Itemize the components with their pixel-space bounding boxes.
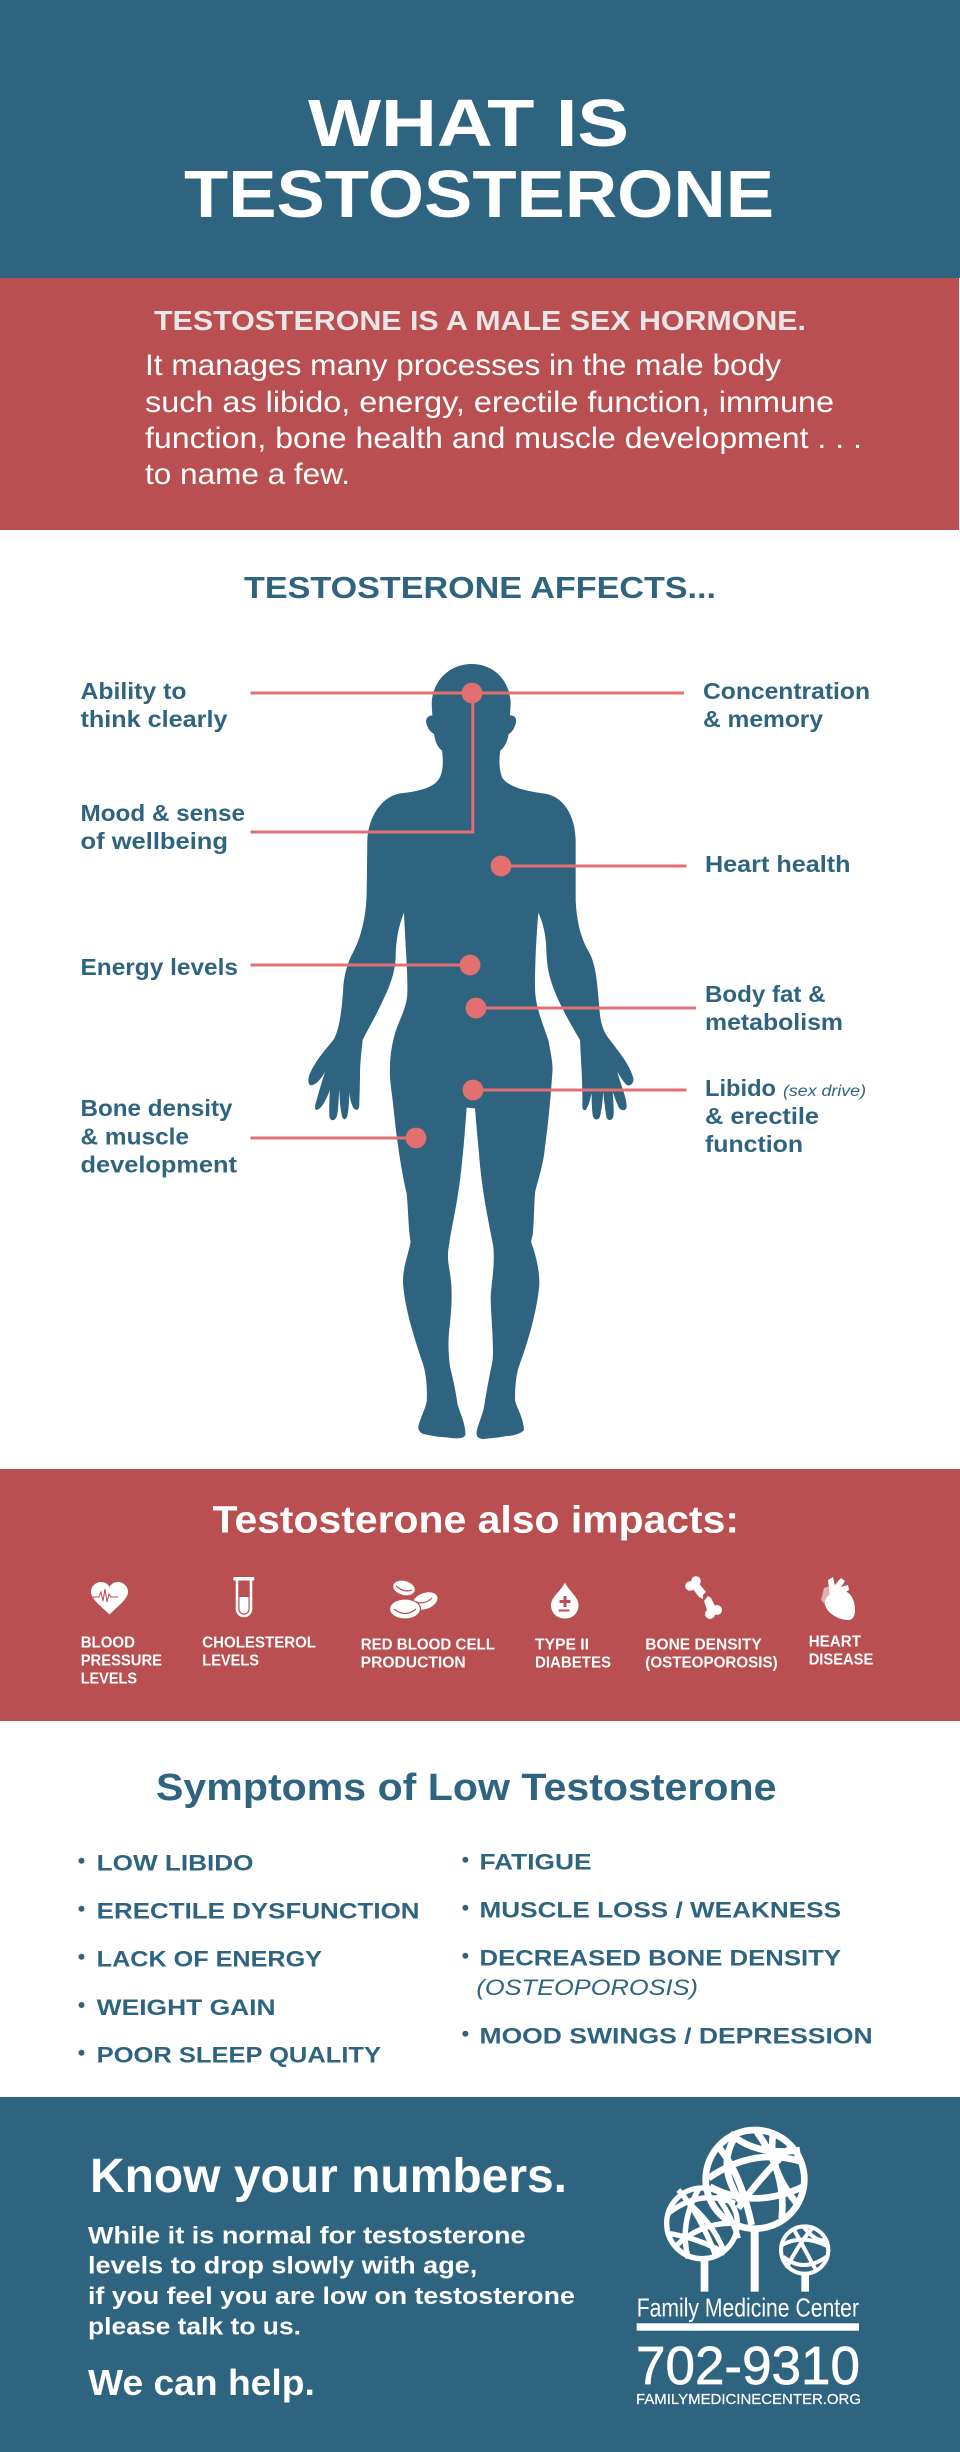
- icon: broken bone: [685, 1576, 722, 1619]
- definition paragraph: to name a few.: [145, 458, 350, 491]
- heading: testosterone affects: TESTOSTERONE AFFECTS...: [244, 570, 716, 605]
- label: blood pressure levels: [81, 1635, 162, 1688]
- symptoms list: left column: ERECTILE DYSFUNCTION: [97, 1899, 419, 1924]
- symptoms list: left column: LOW LIBIDO: [97, 1851, 254, 1876]
- logo name: Family Medicine Center: [637, 2293, 859, 2323]
- panel: testosterone also impacts: [0, 1469, 960, 1721]
- callout lines and dots: [250, 683, 696, 1148]
- label: cholesterol levels: [202, 1635, 316, 1670]
- label: red blood cell production: RED BLOOD CELL: [361, 1636, 495, 1653]
- label: libido and erectile function: & erectile: [705, 1103, 819, 1129]
- website: FAMILYMEDICINECENTER.ORG: [636, 2392, 861, 2408]
- definition paragraph: function, bone health and muscle development . . .: [145, 422, 862, 455]
- definition paragraph: such as libido, energy, erectile function, immune: [145, 386, 834, 419]
- symptoms heading: Symptoms of Low Testosterone: [156, 1767, 777, 1809]
- label: heart disease: [809, 1633, 873, 1668]
- icon: anatomical heart: [821, 1577, 855, 1620]
- icon: body silhouette: [308, 664, 633, 1439]
- title: WHAT IS: [308, 86, 629, 161]
- body diagram: [80, 664, 870, 1439]
- label: body fat and metabolism: metabolism: [705, 1009, 843, 1035]
- label: concentration and memory: & memory: [703, 706, 823, 732]
- label: type ii diabetes: [535, 1636, 611, 1671]
- label: bone density and muscle development: Bone density: [80, 1095, 233, 1121]
- icon: family medicine center tree logo: [667, 2130, 828, 2292]
- label: bone density and muscle development: [80, 1095, 237, 1178]
- label: blood pressure levels: LEVELS: [81, 1671, 137, 1688]
- label: concentration and memory: Concentration: [703, 678, 870, 704]
- footer paragraph: please talk to us.: [88, 2313, 301, 2340]
- label: cholesterol levels: LEVELS: [202, 1653, 259, 1670]
- label: bone density osteoporosis: BONE DENSITY: [645, 1636, 762, 1653]
- symptoms list: right column: DECREASED BONE DENSITY: [480, 1946, 841, 1971]
- label: red blood cell production: [361, 1636, 495, 1671]
- label: bone density osteoporosis: [645, 1636, 778, 1671]
- label: mood and wellbeing: [80, 800, 245, 854]
- symptoms list: right column: FATIGUE: [480, 1850, 592, 1875]
- footer paragraph: While it is normal for testosterone: [88, 2222, 526, 2249]
- footer paragraph: if you feel you are low on testosterone: [88, 2283, 575, 2310]
- icon: heart with pulse: [91, 1582, 128, 1614]
- label: ability to think clearly: Ability to: [80, 678, 186, 704]
- label: energy levels: Energy levels: [80, 954, 238, 980]
- label: concentration and memory: [703, 678, 870, 732]
- label: bone density and muscle development: & muscle: [80, 1124, 189, 1150]
- label: libido and erectile function: [705, 1075, 866, 1157]
- symptoms list: left column: POOR SLEEP QUALITY: [97, 2043, 381, 2068]
- label: blood pressure levels: BLOOD: [81, 1635, 135, 1652]
- label: type ii diabetes: DIABETES: [535, 1654, 611, 1671]
- label: blood pressure levels: PRESSURE: [81, 1653, 162, 1670]
- symptoms list: right column: [462, 1850, 873, 2049]
- label: bone density and muscle development: development: [80, 1152, 237, 1178]
- label: bone density osteoporosis: (OSTEOPOROSIS): [645, 1654, 778, 1671]
- label: red blood cell production: PRODUCTION: [361, 1654, 466, 1671]
- label: ability to think clearly: think clearly: [80, 706, 228, 732]
- footer heading: Know your numbers.: [90, 2150, 567, 2203]
- footer callout: we can help: We can help.: [88, 2362, 315, 2403]
- label: libido and erectile function: function: [705, 1131, 803, 1157]
- label: type ii diabetes: TYPE II: [535, 1636, 589, 1653]
- symptoms list: right column: MOOD SWINGS / DEPRESSION: [480, 2024, 873, 2049]
- icon: test tube: [233, 1577, 254, 1616]
- title: TESTOSTERONE: [184, 157, 774, 232]
- symptoms list: right column: MUSCLE LOSS / WEAKNESS: [480, 1898, 841, 1923]
- title: [184, 86, 774, 232]
- header panel: [0, 0, 960, 278]
- label: heart disease: DISEASE: [809, 1651, 873, 1668]
- label: mood and wellbeing: of wellbeing: [80, 828, 228, 854]
- symptoms list: left column: WEIGHT GAIN: [97, 1995, 276, 2020]
- icon: red blood cells: [390, 1578, 440, 1619]
- label: heart disease: HEART: [809, 1633, 862, 1650]
- label: mood and wellbeing: Mood & sense: [80, 800, 245, 826]
- symptoms list: left column: LACK OF ENERGY: [97, 1947, 322, 1972]
- label: heart health: Heart health: [705, 851, 850, 877]
- symptoms list: left column: [78, 1851, 420, 2068]
- panel: definition: [0, 278, 959, 530]
- symptoms list: right column: (OSTEOPOROSIS): [476, 1975, 698, 2000]
- panel: know your numbers footer: [0, 2097, 960, 2452]
- label: cholesterol levels: CHOLESTEROL: [202, 1635, 316, 1652]
- definition paragraph: It manages many processes in the male body: [145, 349, 781, 382]
- footer paragraph: levels to drop slowly with age,: [88, 2253, 477, 2280]
- phone number: 702-9310: [636, 2336, 860, 2396]
- panel: symptoms of low testosterone: [78, 1767, 873, 2068]
- impacts heading: Testosterone also impacts:: [212, 1500, 739, 1542]
- icon: blood drop with plus and minus: [551, 1582, 578, 1618]
- label: body fat and metabolism: Body fat &: [705, 981, 826, 1007]
- label: ability to think clearly: [80, 678, 228, 732]
- definition heading: TESTOSTERONE IS A MALE SEX HORMONE.: [154, 305, 806, 336]
- label: libido and erectile function: Libido: [705, 1075, 776, 1101]
- label: libido and erectile function: (sex drive): [783, 1083, 866, 1100]
- label: body fat and metabolism: [705, 981, 843, 1035]
- definition paragraph: [145, 349, 862, 491]
- footer paragraph: [88, 2222, 575, 2340]
